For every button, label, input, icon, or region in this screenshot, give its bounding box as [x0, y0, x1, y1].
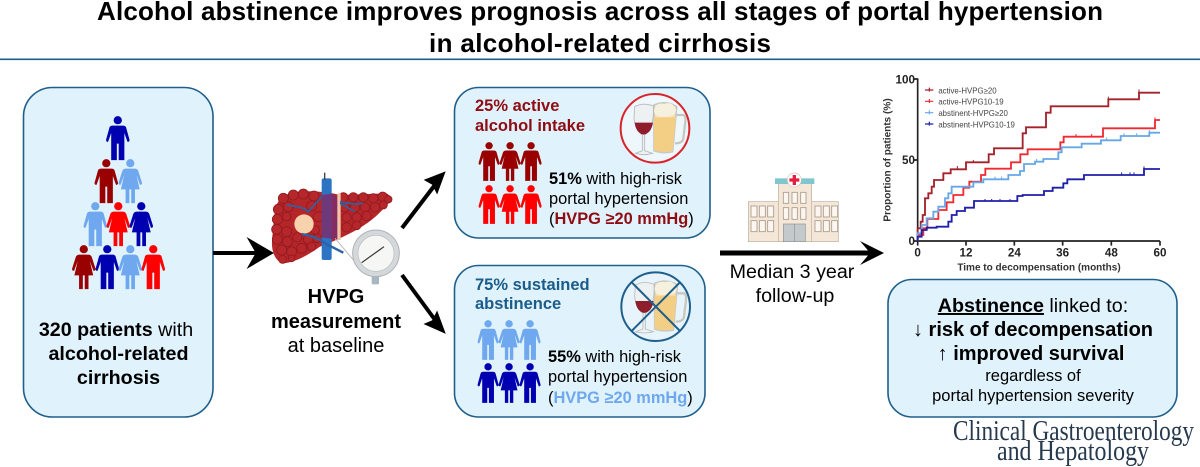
text: abstinent group statistic	[548, 348, 693, 407]
title: in alcohol-related cirrhosis	[429, 28, 771, 58]
text: abstinence benefits: Abstinence linked to:	[938, 295, 1128, 317]
icon: crossed-out wine and beer	[621, 272, 690, 341]
text: abstinence benefits: portal hypertension severity	[932, 387, 1135, 405]
axis labels: 0	[909, 235, 915, 248]
icon: liver with pressure gauge	[272, 173, 399, 284]
legend: abstinent-HVPG10-19	[938, 120, 1015, 129]
text: abstinent group statistic: (HVPG ≥20 mmHg)	[548, 389, 693, 407]
axis labels: 50	[902, 154, 915, 167]
curve: abstinent HVPG 20 or above	[918, 133, 1160, 241]
heading: active alcohol: alcohol intake	[475, 117, 585, 135]
curve: active HVPG 10-19	[918, 120, 1160, 241]
axis labels: 48	[1105, 246, 1118, 259]
axes	[913, 78, 1160, 246]
title	[97, 0, 1103, 58]
text: active group statistic: (HVPG ≥20 mmHg)	[549, 210, 694, 228]
legend: abstinent-HVPG≥20	[938, 109, 1009, 118]
text: active group statistic	[549, 170, 694, 228]
text: abstinence benefits: regardless of	[985, 367, 1081, 385]
text: follow-up duration: follow-up	[756, 285, 834, 307]
icon: wine and beer	[621, 94, 689, 163]
axis labels: 100	[896, 73, 915, 86]
icon: crowd of patients	[72, 116, 165, 289]
arrow: to active alcohol group	[402, 173, 444, 228]
axis labels: 0	[914, 246, 921, 259]
censor ticks	[957, 89, 1155, 201]
panel: sustained abstinence	[454, 266, 705, 417]
text: HVPG measurement: at baseline	[288, 335, 384, 357]
text: active group statistic: portal hypertension	[549, 190, 688, 208]
text: abstinence benefits: ↑ improved survival	[938, 343, 1124, 365]
text: follow-up duration	[730, 261, 855, 307]
axis labels: Proportion of patients (%)	[882, 98, 893, 222]
arrow: cohort to liver	[213, 242, 270, 264]
pressure gauge	[335, 230, 399, 284]
text: patient description	[39, 319, 193, 389]
axis labels	[882, 73, 1166, 274]
legend	[925, 86, 1015, 129]
text: patient description: alcohol-related	[48, 343, 189, 365]
arrow: to abstinence group	[402, 275, 444, 332]
text: active group statistic: 51% with high-risk	[549, 170, 683, 188]
text: patient description: 320 patients with	[39, 319, 193, 341]
legend: active-HVPG≥20	[938, 86, 997, 95]
text: abstinent group statistic: 55% with high-risk	[548, 348, 682, 366]
arrow: follow-up timeline	[720, 241, 884, 265]
panel: conclusions	[888, 280, 1177, 417]
heading: abstinence	[475, 276, 590, 313]
text: patient description: cirrhosis	[77, 367, 160, 389]
panel: patient cohort	[24, 88, 213, 417]
axis labels: 60	[1154, 246, 1166, 259]
journal logo: and Hepatology	[997, 435, 1149, 467]
heading: abstinence: 75% sustained	[475, 276, 590, 294]
text: abstinence benefits	[913, 295, 1153, 405]
axis labels: Time to decompensation (months)	[957, 263, 1121, 274]
legend: active-HVPG10-19	[938, 98, 1004, 107]
journal logo	[953, 415, 1194, 467]
heading: active alcohol: 25% active	[475, 97, 559, 115]
curve: active HVPG 20 or above	[918, 93, 1160, 241]
icon: hospital	[748, 173, 838, 242]
lesion and veins	[287, 197, 363, 253]
text: follow-up duration: Median 3 year	[730, 261, 855, 283]
heading: abstinence: abstinence	[475, 295, 561, 313]
axis labels: 12	[960, 246, 973, 259]
inferior vena cava	[322, 173, 341, 260]
chart: cumulative incidence of decompensation	[882, 73, 1166, 274]
curve: abstinent HVPG 10-19	[918, 169, 1160, 241]
text: HVPG measurement	[271, 286, 401, 357]
axis labels: 36	[1056, 246, 1070, 259]
icon: abstinent patients	[478, 320, 541, 403]
text: HVPG measurement: HVPG	[308, 286, 364, 308]
panel: active alcohol intake	[454, 88, 710, 238]
icon: active drinkers	[479, 142, 542, 224]
text: abstinent group statistic: portal hypertension	[548, 368, 687, 386]
axis labels: 24	[1008, 246, 1021, 259]
heading: active alcohol	[475, 97, 585, 135]
text: HVPG measurement: measurement	[271, 311, 401, 333]
text: abstinence benefits: ↓ risk of decompensation	[913, 319, 1153, 341]
